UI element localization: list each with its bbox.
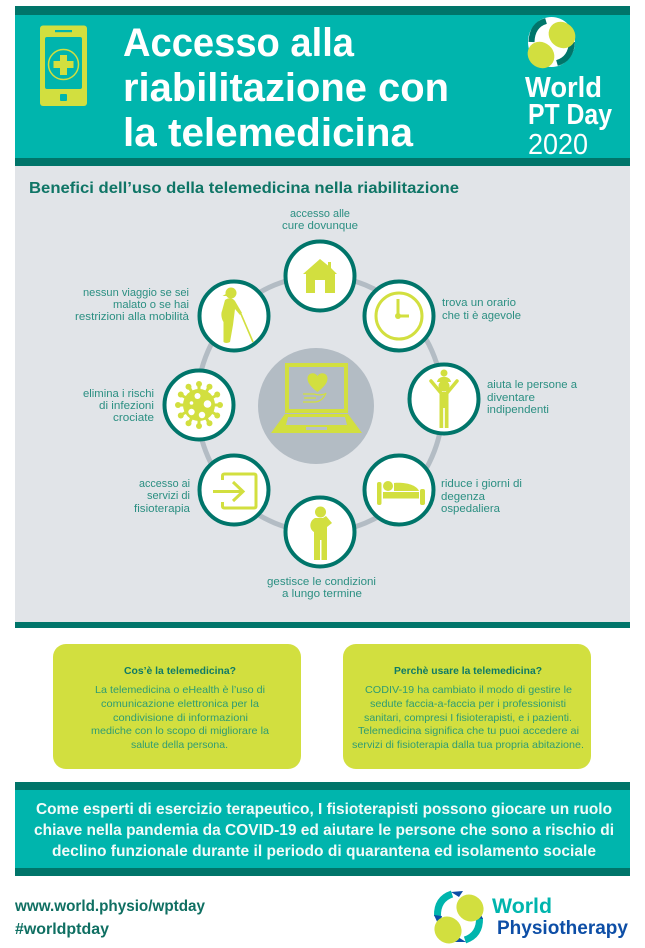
benefit: no travel if ill or with limited mobility: nessun viaggio se sei	[83, 287, 189, 299]
card: what is telemedicine: comunicazione elettronica per la	[101, 698, 259, 710]
benefit: find a convenient time: trova un orario	[442, 297, 516, 309]
card: what is telemedicine: Cos’è la telemedicina?	[124, 665, 236, 677]
benefit: manages long-term conditions: a lungo termine	[282, 588, 362, 600]
benefit: reduces hospital stay	[364, 456, 522, 524]
card: why use telemedicine: CODIV-19 ha cambiato il modo di gestire le	[365, 684, 572, 696]
logo: World Physiotherapy: World	[492, 895, 552, 918]
benefit: eliminates cross-infection risk: elimina i rischi	[83, 388, 154, 400]
benefit: eliminates cross-infection risk: di infezioni	[99, 400, 154, 412]
benefit: access to physiotherapy services: accesso ai	[139, 478, 190, 490]
card: what is telemedicine: condivisione di informazioni	[113, 712, 248, 724]
card: why use telemedicine: Telemedicina significa che tu puoi accedere ai	[358, 725, 579, 737]
benefit: helps people become independent: diventare	[487, 392, 535, 404]
benefit: access to physiotherapy services: fisioterapia	[134, 503, 191, 515]
benefit: reduces hospital stay: degenza	[441, 491, 486, 503]
title: riabilitazione con	[123, 66, 449, 110]
benefit: helps people become independent	[410, 364, 578, 434]
benefit: access to care anywhere	[282, 208, 358, 310]
card: what is telemedicine	[53, 644, 301, 769]
benefit: access to care anywhere: accesso alle	[290, 208, 350, 220]
logo: World Physiotherapy: Physiotherapy	[497, 917, 628, 939]
card: why use telemedicine: Perchè usare la telemedicina?	[394, 665, 542, 677]
benefit: access to physiotherapy services: servizi di	[147, 490, 190, 502]
card: what is telemedicine: La telemedicina o eHealth è l’uso di	[95, 684, 265, 696]
panel: benefits of telemedicine	[15, 166, 630, 628]
logo: World Physiotherapy	[429, 889, 628, 948]
card: why use telemedicine: sanitari, compresi I fisioterapisti, e i pazienti.	[364, 712, 572, 724]
title	[123, 21, 449, 155]
icon: smartphone with medical cross	[40, 26, 87, 106]
card: why use telemedicine	[343, 644, 591, 769]
benefit: eliminates cross-infection risk: crociate	[113, 412, 154, 424]
benefit: no travel if ill or with limited mobility: restrizioni alla mobilità	[75, 311, 190, 323]
callout: role of physiotherapists: chiave nella pandemia da COVID-19 ed aiutare le persone che sono a rischio di	[34, 822, 614, 839]
logo: World PT Day 2020: PT Day	[528, 99, 612, 131]
logo: World PT Day 2020: 2020	[528, 129, 588, 161]
benefit: reduces hospital stay: ospedaliera	[441, 503, 501, 515]
benefit: helps people become independent: indipendenti	[487, 404, 549, 416]
footer links: www.world.physio/wptday	[14, 898, 205, 915]
card: what is telemedicine: salute della persona.	[131, 739, 228, 751]
card: why use telemedicine: sedute faccia-a-faccia per i professionisti	[370, 698, 566, 710]
benefit: reduces hospital stay: riduce i giorni di	[441, 478, 522, 490]
footer links	[14, 898, 205, 938]
header banner	[15, 6, 630, 166]
logo: World PT Day 2020: World	[525, 72, 602, 104]
title: Accesso alla	[123, 21, 355, 65]
callout: role of physiotherapists: Come esperti di esercizio terapeutico, I fisioterapisti possono giocare un ruolo	[36, 801, 612, 818]
benefit: manages long-term conditions	[267, 498, 376, 600]
benefit: helps people become independent: aiuta le persone a	[487, 379, 578, 391]
heading: benefits: Benefici dell’uso della telemedicina nella riabilitazione	[29, 180, 459, 197]
benefit: manages long-term conditions: gestisce le condizioni	[267, 576, 376, 588]
ring connecting the benefits	[197, 276, 443, 532]
benefit: eliminates cross-infection risk	[83, 370, 234, 440]
benefit: access to care anywhere: cure dovunque	[282, 220, 358, 232]
benefit: no travel if ill or with limited mobility: malato o se hai	[113, 299, 189, 311]
benefit: find a convenient time	[364, 282, 521, 350]
callout: role of physiotherapists: declino funzionale durante il periodo di quarantena ed isolamento sociale	[52, 843, 596, 860]
benefit: no travel if ill or with limited mobility	[75, 282, 268, 350]
logo: World PT Day 2020	[522, 16, 612, 161]
title: la telemedicina	[123, 111, 414, 155]
benefit: find a convenient time: che ti è agevole	[442, 310, 521, 322]
callout: role of physiotherapists	[15, 782, 630, 876]
card: what is telemedicine: mediche con lo scopo di migliorare la	[91, 725, 269, 737]
footer links: #worldptday	[15, 921, 109, 938]
card: why use telemedicine: servizi di fisioterapia dalla tua propria abitazione.	[352, 739, 584, 751]
benefit: access to physiotherapy services	[134, 456, 268, 524]
central icon: laptop with heart and hand	[258, 348, 374, 464]
